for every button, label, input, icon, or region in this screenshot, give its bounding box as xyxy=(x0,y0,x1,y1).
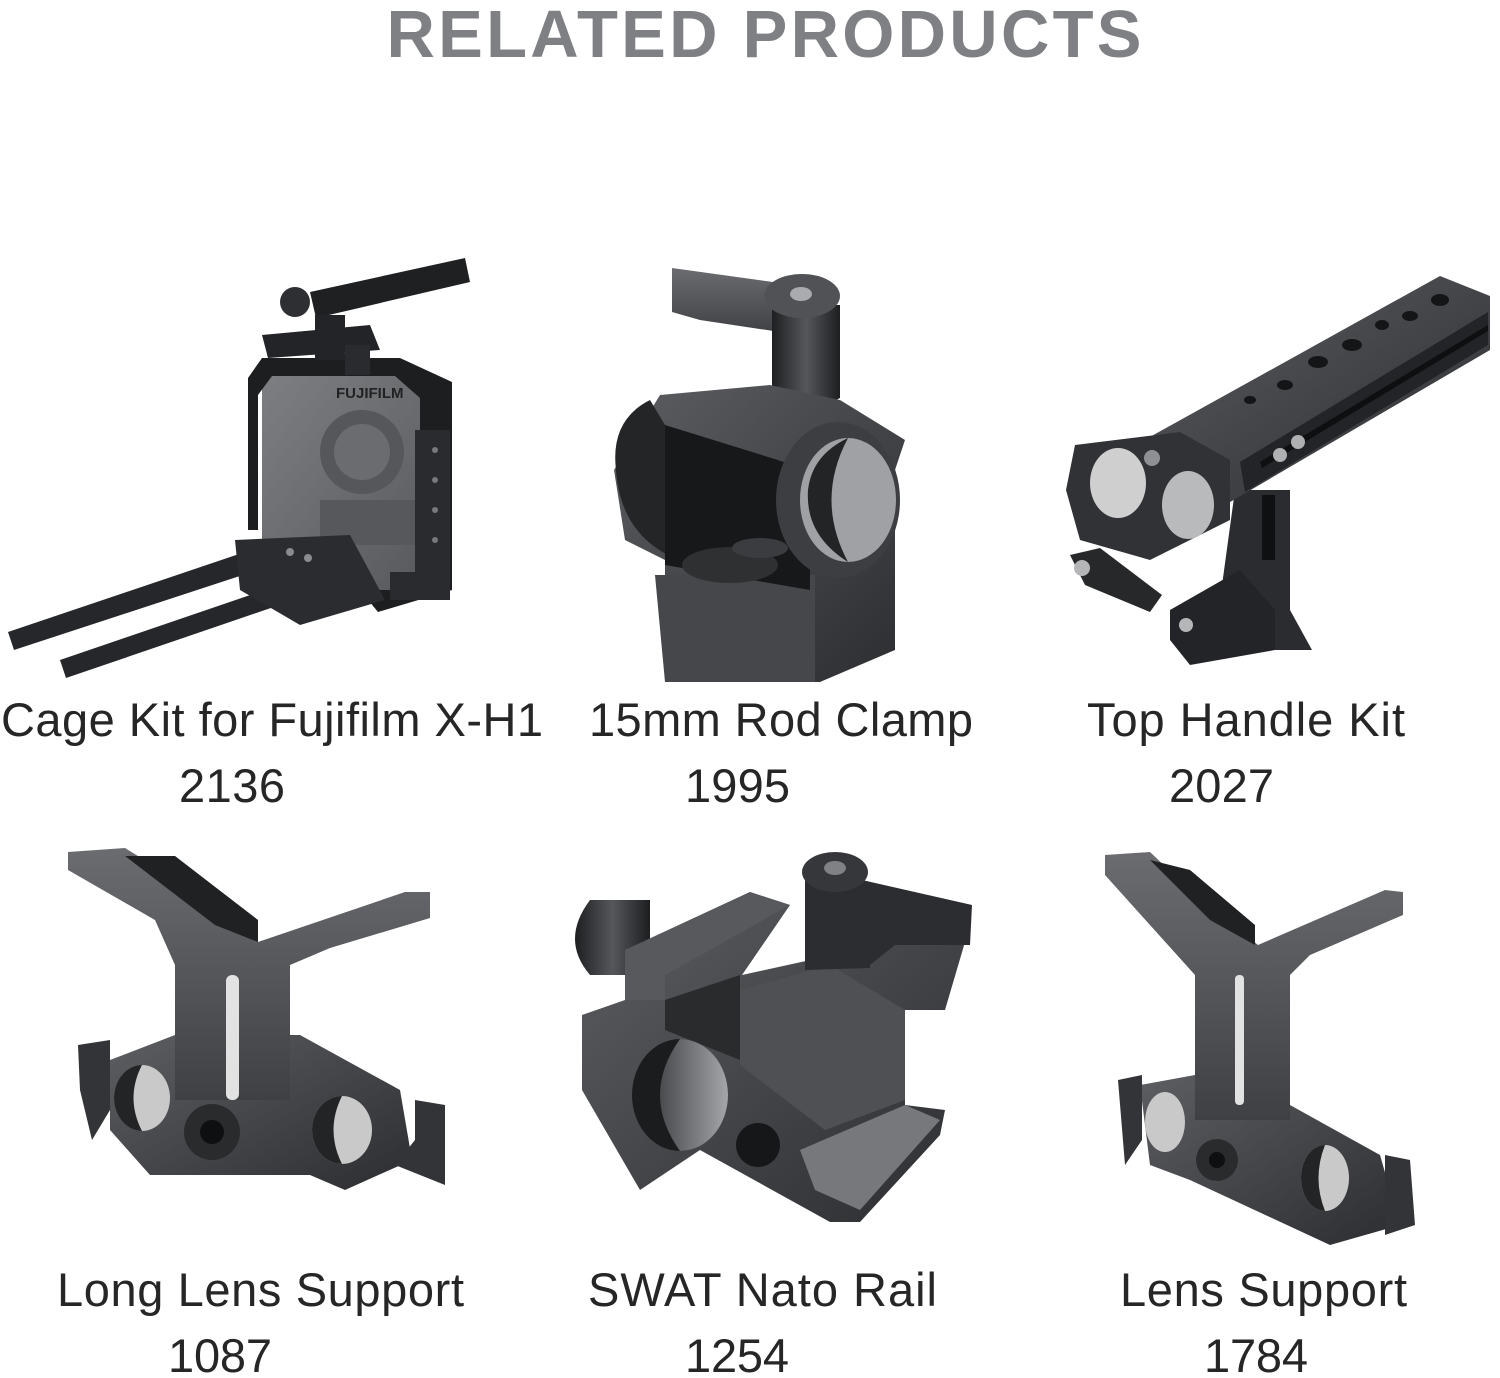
label: SWAT nato rail xyxy=(588,1263,937,1378)
label: rod clamp xyxy=(589,693,973,812)
label: top handle kit: Top Handle Kit xyxy=(1087,693,1405,746)
stem xyxy=(1220,490,1312,650)
product: cage kit for Fujifilm X-H1 xyxy=(8,258,470,678)
label: cage kit xyxy=(1,693,543,812)
label: long lens support xyxy=(57,1263,464,1378)
label: lens support xyxy=(1120,1263,1407,1378)
label: cage kit: 2136 xyxy=(179,759,285,812)
side knob xyxy=(575,900,650,975)
lever and screw xyxy=(805,880,972,970)
base plate xyxy=(235,535,385,625)
product: long lens support xyxy=(68,848,445,1190)
top handle xyxy=(310,258,470,318)
block xyxy=(582,892,970,1222)
levers xyxy=(1118,1075,1415,1235)
label: SWAT nato rail: SWAT Nato Rail xyxy=(588,1263,937,1316)
bore xyxy=(632,1039,728,1151)
Y bracket xyxy=(68,848,430,1100)
lower clamps xyxy=(1140,1075,1400,1245)
product: lens support xyxy=(1105,852,1415,1245)
knob xyxy=(184,1104,240,1160)
label: long lens support: Long Lens Support xyxy=(57,1263,464,1316)
label: rod clamp: 15mm Rod Clamp xyxy=(589,693,973,746)
clamp body xyxy=(614,385,905,682)
label: top handle kit: 2027 xyxy=(1169,759,1274,812)
Y bracket xyxy=(1105,852,1403,1120)
product: 15mm rod clamp xyxy=(614,268,905,682)
product: SWAT nato rail xyxy=(575,852,972,1222)
cage frame xyxy=(248,358,452,612)
lever xyxy=(672,268,800,335)
knob xyxy=(1196,1139,1238,1181)
label: cage kit: Cage Kit for Fujifilm X-H1 xyxy=(1,693,543,746)
handle xyxy=(1130,276,1490,505)
label: lens support: Lens Support xyxy=(1120,1263,1407,1316)
levers xyxy=(1070,548,1162,612)
camera body xyxy=(262,372,442,590)
rods xyxy=(8,552,306,678)
bore xyxy=(776,422,900,578)
product: top handle kit xyxy=(1066,276,1490,665)
label: rod clamp: 1995 xyxy=(685,759,790,812)
label: top handle kit xyxy=(1087,693,1405,812)
levers xyxy=(78,1040,445,1185)
product: cage kit for Fujifilm X-H1: FUJIFILM xyxy=(336,385,404,402)
rod clamps xyxy=(1066,432,1230,560)
lower clamps xyxy=(110,1035,412,1190)
